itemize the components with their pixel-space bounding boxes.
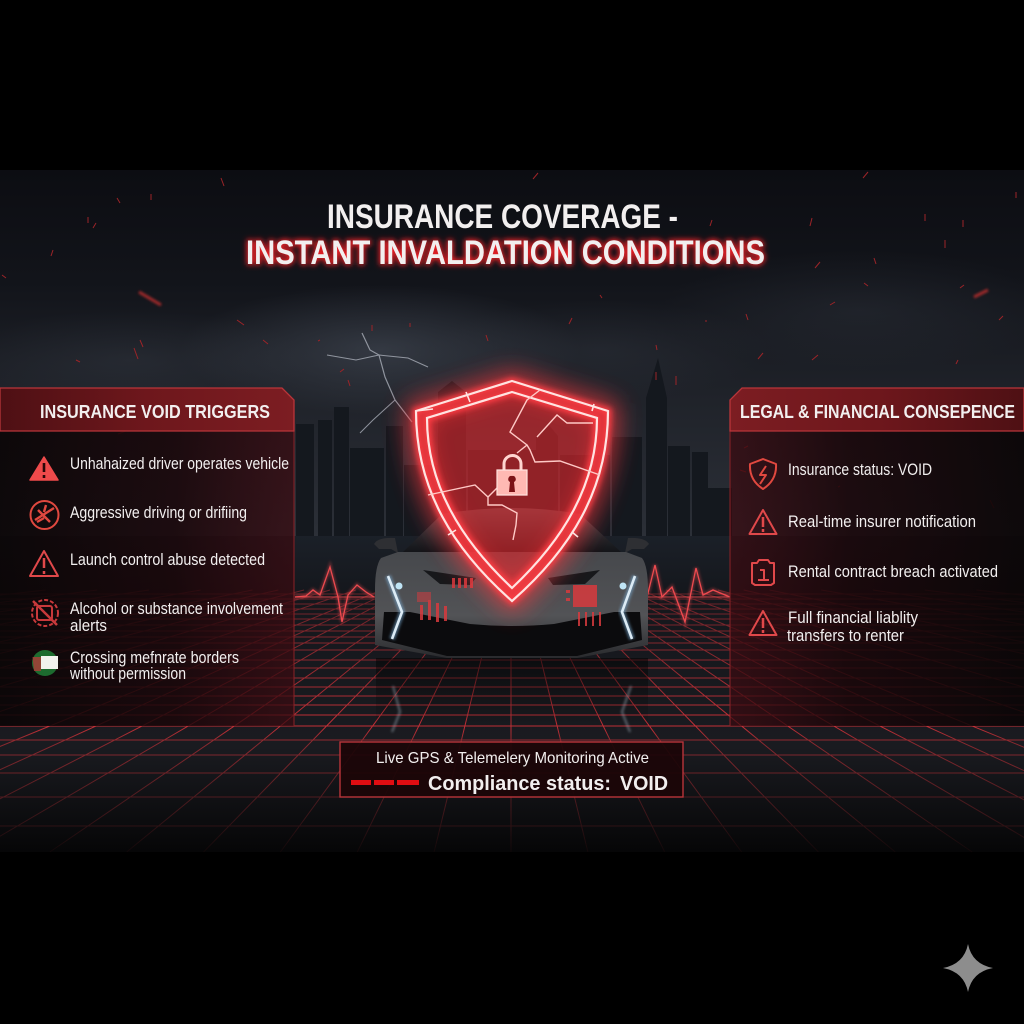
item 4 text: alerts (70, 617, 107, 635)
car mirrors (374, 538, 649, 553)
car reflection (376, 658, 648, 732)
floor (0, 590, 1024, 852)
item 4 text (787, 609, 919, 645)
icon: outline warning triangle (30, 551, 58, 576)
red perspective grid (0, 590, 1024, 852)
icon: border flag (32, 650, 58, 676)
icon: lightning bolt (327, 333, 428, 433)
title line 1: INSURANCE COVERAGE - (327, 198, 678, 236)
icon: padlock (497, 456, 527, 495)
car hood vents (423, 570, 600, 585)
item 2 text: Real-time insurer notification (788, 513, 976, 531)
large blurred spark (139, 290, 988, 305)
icon: sparkle watermark (943, 944, 993, 992)
compliance label: Compliance status: (428, 773, 611, 795)
item 3 text: Launch control abuse detected (70, 551, 265, 569)
icon: warning triangle (750, 510, 776, 534)
panel header (0, 388, 294, 431)
icon: filled warning triangle (30, 457, 58, 480)
shield glow (416, 381, 608, 601)
item 5 text: Crossing mefnrate borders (70, 649, 239, 667)
panel: legal and financial consequence (730, 388, 1024, 726)
item 4 text: Alcohol or substance involvement (70, 600, 283, 618)
icon: no aggressive driving (30, 501, 58, 529)
panel body (0, 431, 294, 726)
item 5 text: without permission (69, 665, 186, 683)
item 4 text: Full financial liablity (788, 609, 919, 627)
title (246, 198, 765, 272)
item 3 text: Rental contract breach activated (788, 563, 998, 581)
panel heading text: INSURANCE VOID TRIGGERS (40, 402, 270, 422)
void value: VOID (620, 773, 668, 795)
item 1 text: Unhahaized driver operates vehicle (70, 455, 289, 473)
car lower bumper and intake (382, 612, 642, 656)
car windshield and roof (402, 508, 622, 553)
icon: broken shield (750, 459, 776, 489)
item 4 text: transfers to renter (787, 627, 904, 645)
monitoring text: Live GPS & Telemelery Monitoring Active (376, 750, 649, 767)
floating red sparks (2, 172, 1016, 508)
item 2 text: Aggressive driving or drifiing (70, 504, 247, 522)
shield cracks (428, 390, 600, 540)
scene: stormy sky (0, 170, 1024, 540)
item 1 text: Insurance status: VOID (788, 461, 932, 479)
car circuit marks (417, 578, 601, 626)
red dashes (351, 780, 419, 785)
icon: liability warning triangle (750, 611, 776, 635)
title line 2 glow: INSTANT INVALDATION CONDITIONS (246, 234, 765, 272)
neon cracked shield (416, 381, 608, 601)
car headlights (396, 582, 626, 590)
heartbeat line right (647, 565, 730, 622)
heartbeat line left (295, 567, 730, 622)
city skyline (296, 358, 732, 540)
panel: insurance void triggers (0, 388, 294, 726)
title line 2: INSTANT INVALDATION CONDITIONS (246, 234, 765, 272)
item 5 text (69, 649, 239, 683)
icon: contract document (752, 560, 774, 585)
sports car (374, 508, 649, 732)
icon: no alcohol (32, 600, 58, 626)
car daytime running lights (388, 576, 635, 639)
status box (340, 742, 683, 797)
water at horizon (0, 536, 1024, 600)
panel header (730, 388, 1024, 431)
item 4 text (70, 600, 283, 635)
car body (375, 552, 648, 658)
panel body (730, 431, 1024, 726)
